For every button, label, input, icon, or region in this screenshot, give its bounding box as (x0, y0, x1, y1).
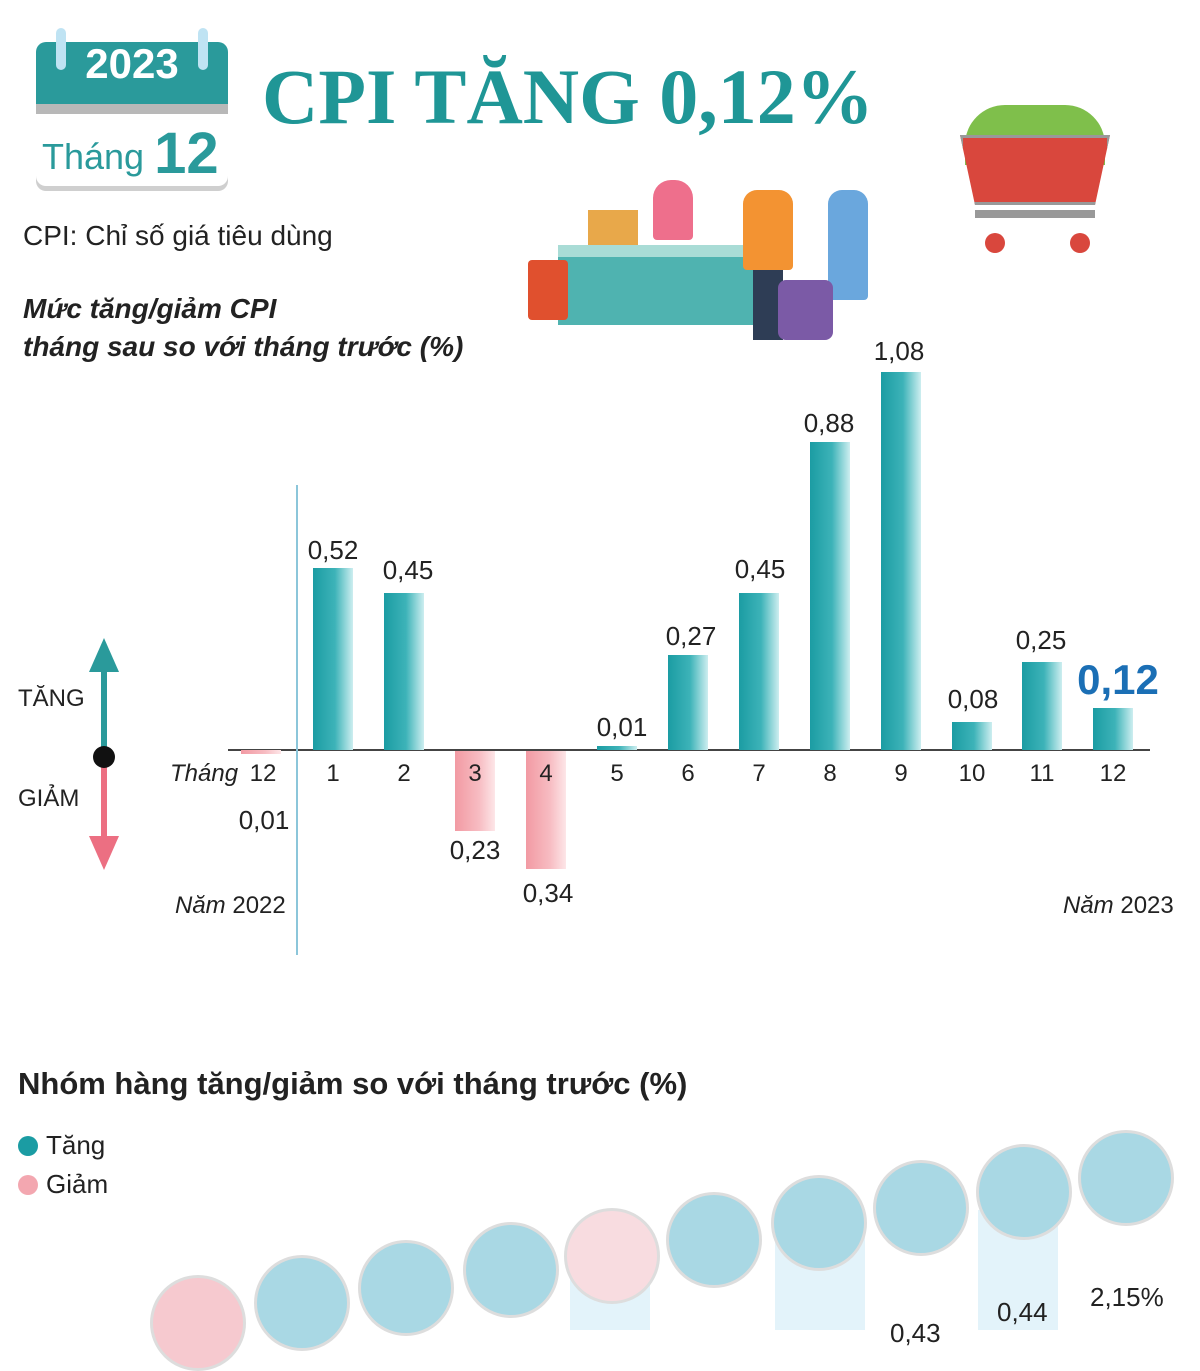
illustration: shop counter (528, 180, 868, 340)
chart heading: tháng sau so với tháng trước (%) (23, 331, 463, 362)
bars and values: 0,12 (1077, 656, 1159, 703)
bars and values: 1,08 (874, 336, 924, 366)
bars and values: 2 (397, 760, 411, 787)
bar chart (228, 485, 1150, 955)
month label: Tháng 12 (42, 121, 219, 186)
arrow: increase/decrease legend: TĂNG (18, 685, 85, 712)
bars and values: 12 (250, 760, 276, 787)
bars and values: 0,08 (948, 684, 998, 714)
chart heading (23, 293, 463, 362)
bars and values: 5 (610, 760, 624, 787)
bars and values: Năm 2022 (175, 892, 286, 919)
bars and values: 1 (326, 760, 340, 787)
text: 0,43 (890, 1318, 941, 1348)
bars and values: 0,45 (735, 554, 785, 584)
arrow: increase/decrease legend (18, 638, 119, 870)
bars and values: 12 (1100, 760, 1126, 787)
category icons row: 2,15% (1090, 1282, 1164, 1312)
category icons row: 0,44 (997, 1297, 1048, 1327)
bars and values: 0,52 (308, 535, 358, 565)
bars and values: 0,88 (804, 408, 854, 438)
bars and values: 0,34 (523, 878, 573, 908)
bars and values: Tháng (170, 760, 238, 787)
bars and values: 0,45 (383, 555, 433, 585)
calendar badge (36, 28, 228, 191)
chart heading: Mức tăng/giảm CPI (23, 293, 276, 324)
year: 2023 (85, 40, 179, 87)
bars and values: 0,27 (666, 621, 716, 651)
bars and values: 4 (539, 760, 553, 787)
subtitle: CPI: Chỉ số giá tiêu dùng (23, 220, 333, 251)
bars and values: 3 (468, 760, 482, 787)
section heading: Nhóm hàng tăng/giảm so với tháng trước (%) (18, 1066, 687, 1101)
bars and values: 10 (959, 760, 985, 787)
legend (18, 1130, 108, 1199)
bars and values (170, 336, 1174, 919)
legend: Tăng (46, 1130, 105, 1160)
bars and values: 0,01 (239, 805, 289, 835)
title: CPI TĂNG 0,12% (262, 53, 874, 140)
bars and values: 7 (752, 760, 766, 787)
arrow: increase/decrease legend: GIẢM (18, 785, 79, 812)
category icons row (150, 1130, 1174, 1371)
bars and values: Năm 2023 (1063, 892, 1174, 919)
legend: Giảm (46, 1169, 108, 1199)
bars and values: 9 (894, 760, 908, 787)
bars and values: 0,23 (450, 835, 500, 865)
bars and values: 0,01 (597, 712, 647, 742)
bars and values: 8 (823, 760, 837, 787)
illustration: shopping cart (960, 105, 1110, 253)
bars and values: 6 (681, 760, 695, 787)
bars and values: 11 (1030, 760, 1054, 787)
bars and values: 0,25 (1016, 625, 1066, 655)
